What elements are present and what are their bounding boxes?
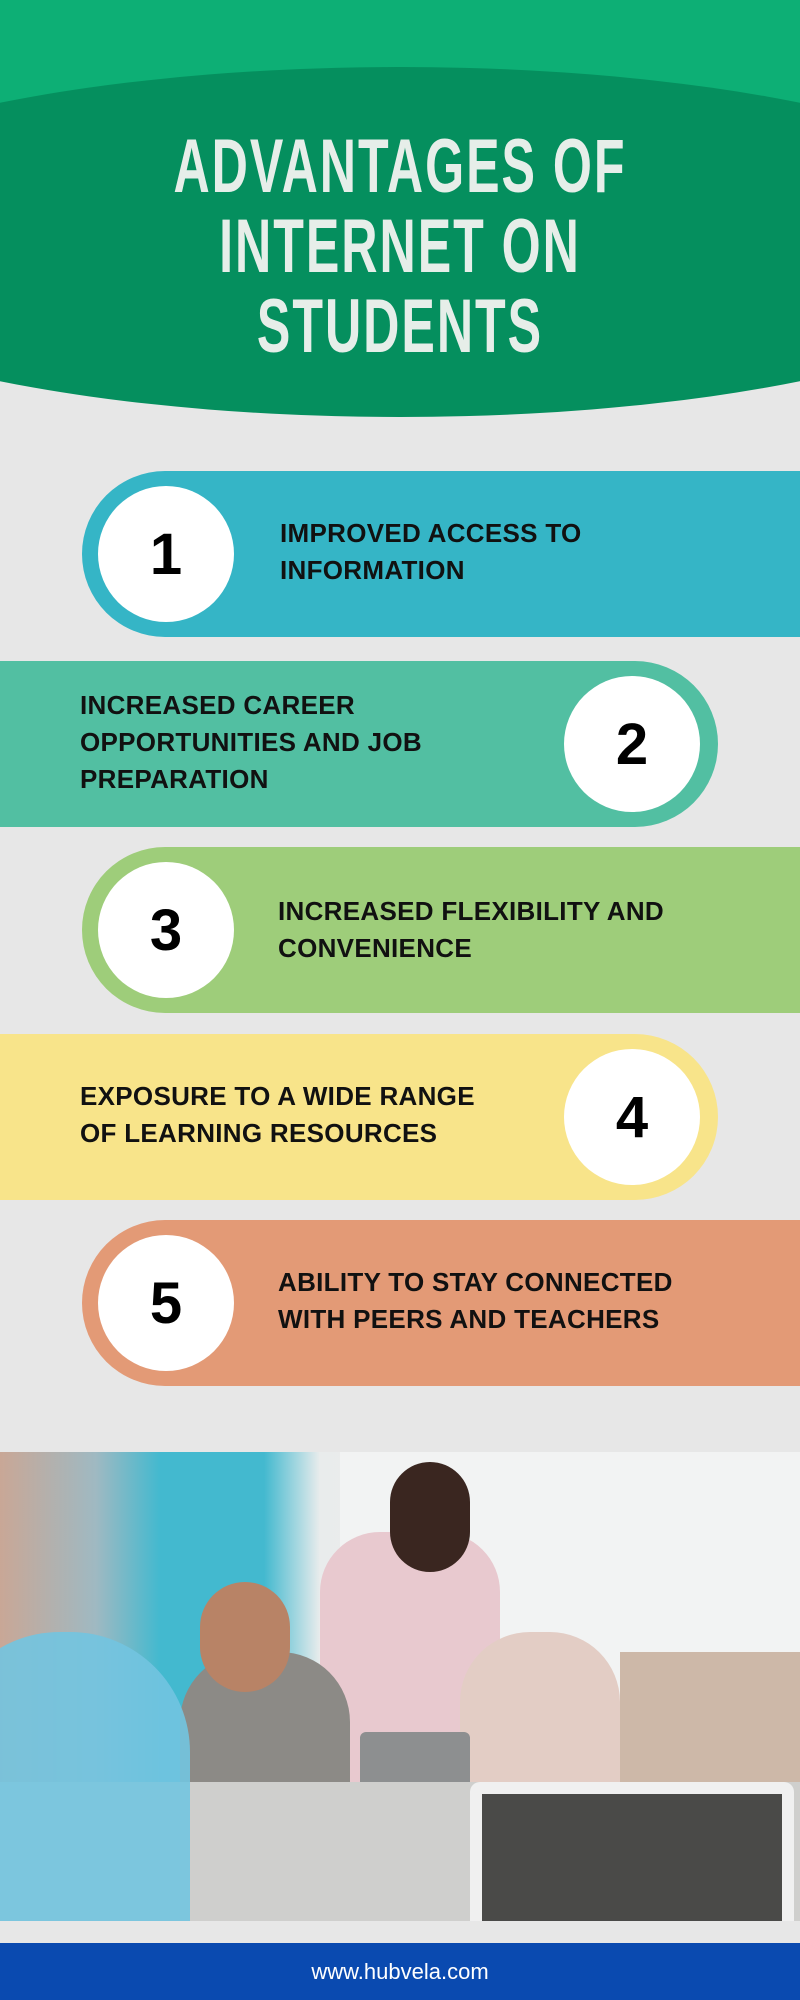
- text 5: [278, 1267, 673, 1334]
- text 2: OPPORTUNITIES AND JOB: [80, 727, 422, 757]
- text 2: INCREASED CAREER: [80, 690, 355, 720]
- text 3: [278, 896, 664, 963]
- text 4: [80, 1081, 475, 1148]
- number 5: 5: [150, 1270, 182, 1336]
- text 5: ABILITY TO STAY CONNECTED: [278, 1267, 673, 1297]
- header background: [0, 0, 800, 330]
- photo: classroom: [0, 1452, 800, 1921]
- number 3: 3: [150, 898, 182, 962]
- title: ADVANTAGES OF: [173, 124, 627, 209]
- number 2: 2: [616, 712, 648, 776]
- text 5: WITH PEERS AND TEACHERS: [278, 1304, 660, 1334]
- text 2: [80, 690, 422, 794]
- number 4: 4: [616, 1084, 648, 1150]
- text 1: [280, 518, 582, 585]
- panel: item 5: [82, 1220, 800, 1386]
- text 1: IMPROVED ACCESS TO: [280, 518, 582, 548]
- number 1: [98, 486, 234, 622]
- title: [173, 124, 627, 369]
- text 4: EXPOSURE TO A WIDE RANGE: [80, 1081, 475, 1111]
- number 3: [98, 862, 234, 998]
- panel: item 2: [0, 661, 718, 827]
- footer: www.hubvela.com: [311, 1959, 489, 1984]
- footer: [0, 1943, 800, 2000]
- number 1: 1: [150, 522, 182, 586]
- header ellipse: [0, 67, 800, 417]
- number 4: [564, 1049, 700, 1185]
- panel: item 4: [0, 1034, 718, 1200]
- panel: item 3: [82, 847, 800, 1013]
- text 3: INCREASED FLEXIBILITY AND: [278, 896, 664, 926]
- title: STUDENTS: [257, 284, 543, 369]
- title: INTERNET ON: [219, 204, 581, 289]
- panel: item 1: [82, 471, 800, 637]
- number 2: [564, 676, 700, 812]
- text 2: PREPARATION: [80, 764, 269, 794]
- text 1: INFORMATION: [280, 555, 465, 585]
- text 4: OF LEARNING RESOURCES: [80, 1118, 437, 1148]
- number 5: [98, 1235, 234, 1371]
- text 3: CONVENIENCE: [278, 933, 472, 963]
